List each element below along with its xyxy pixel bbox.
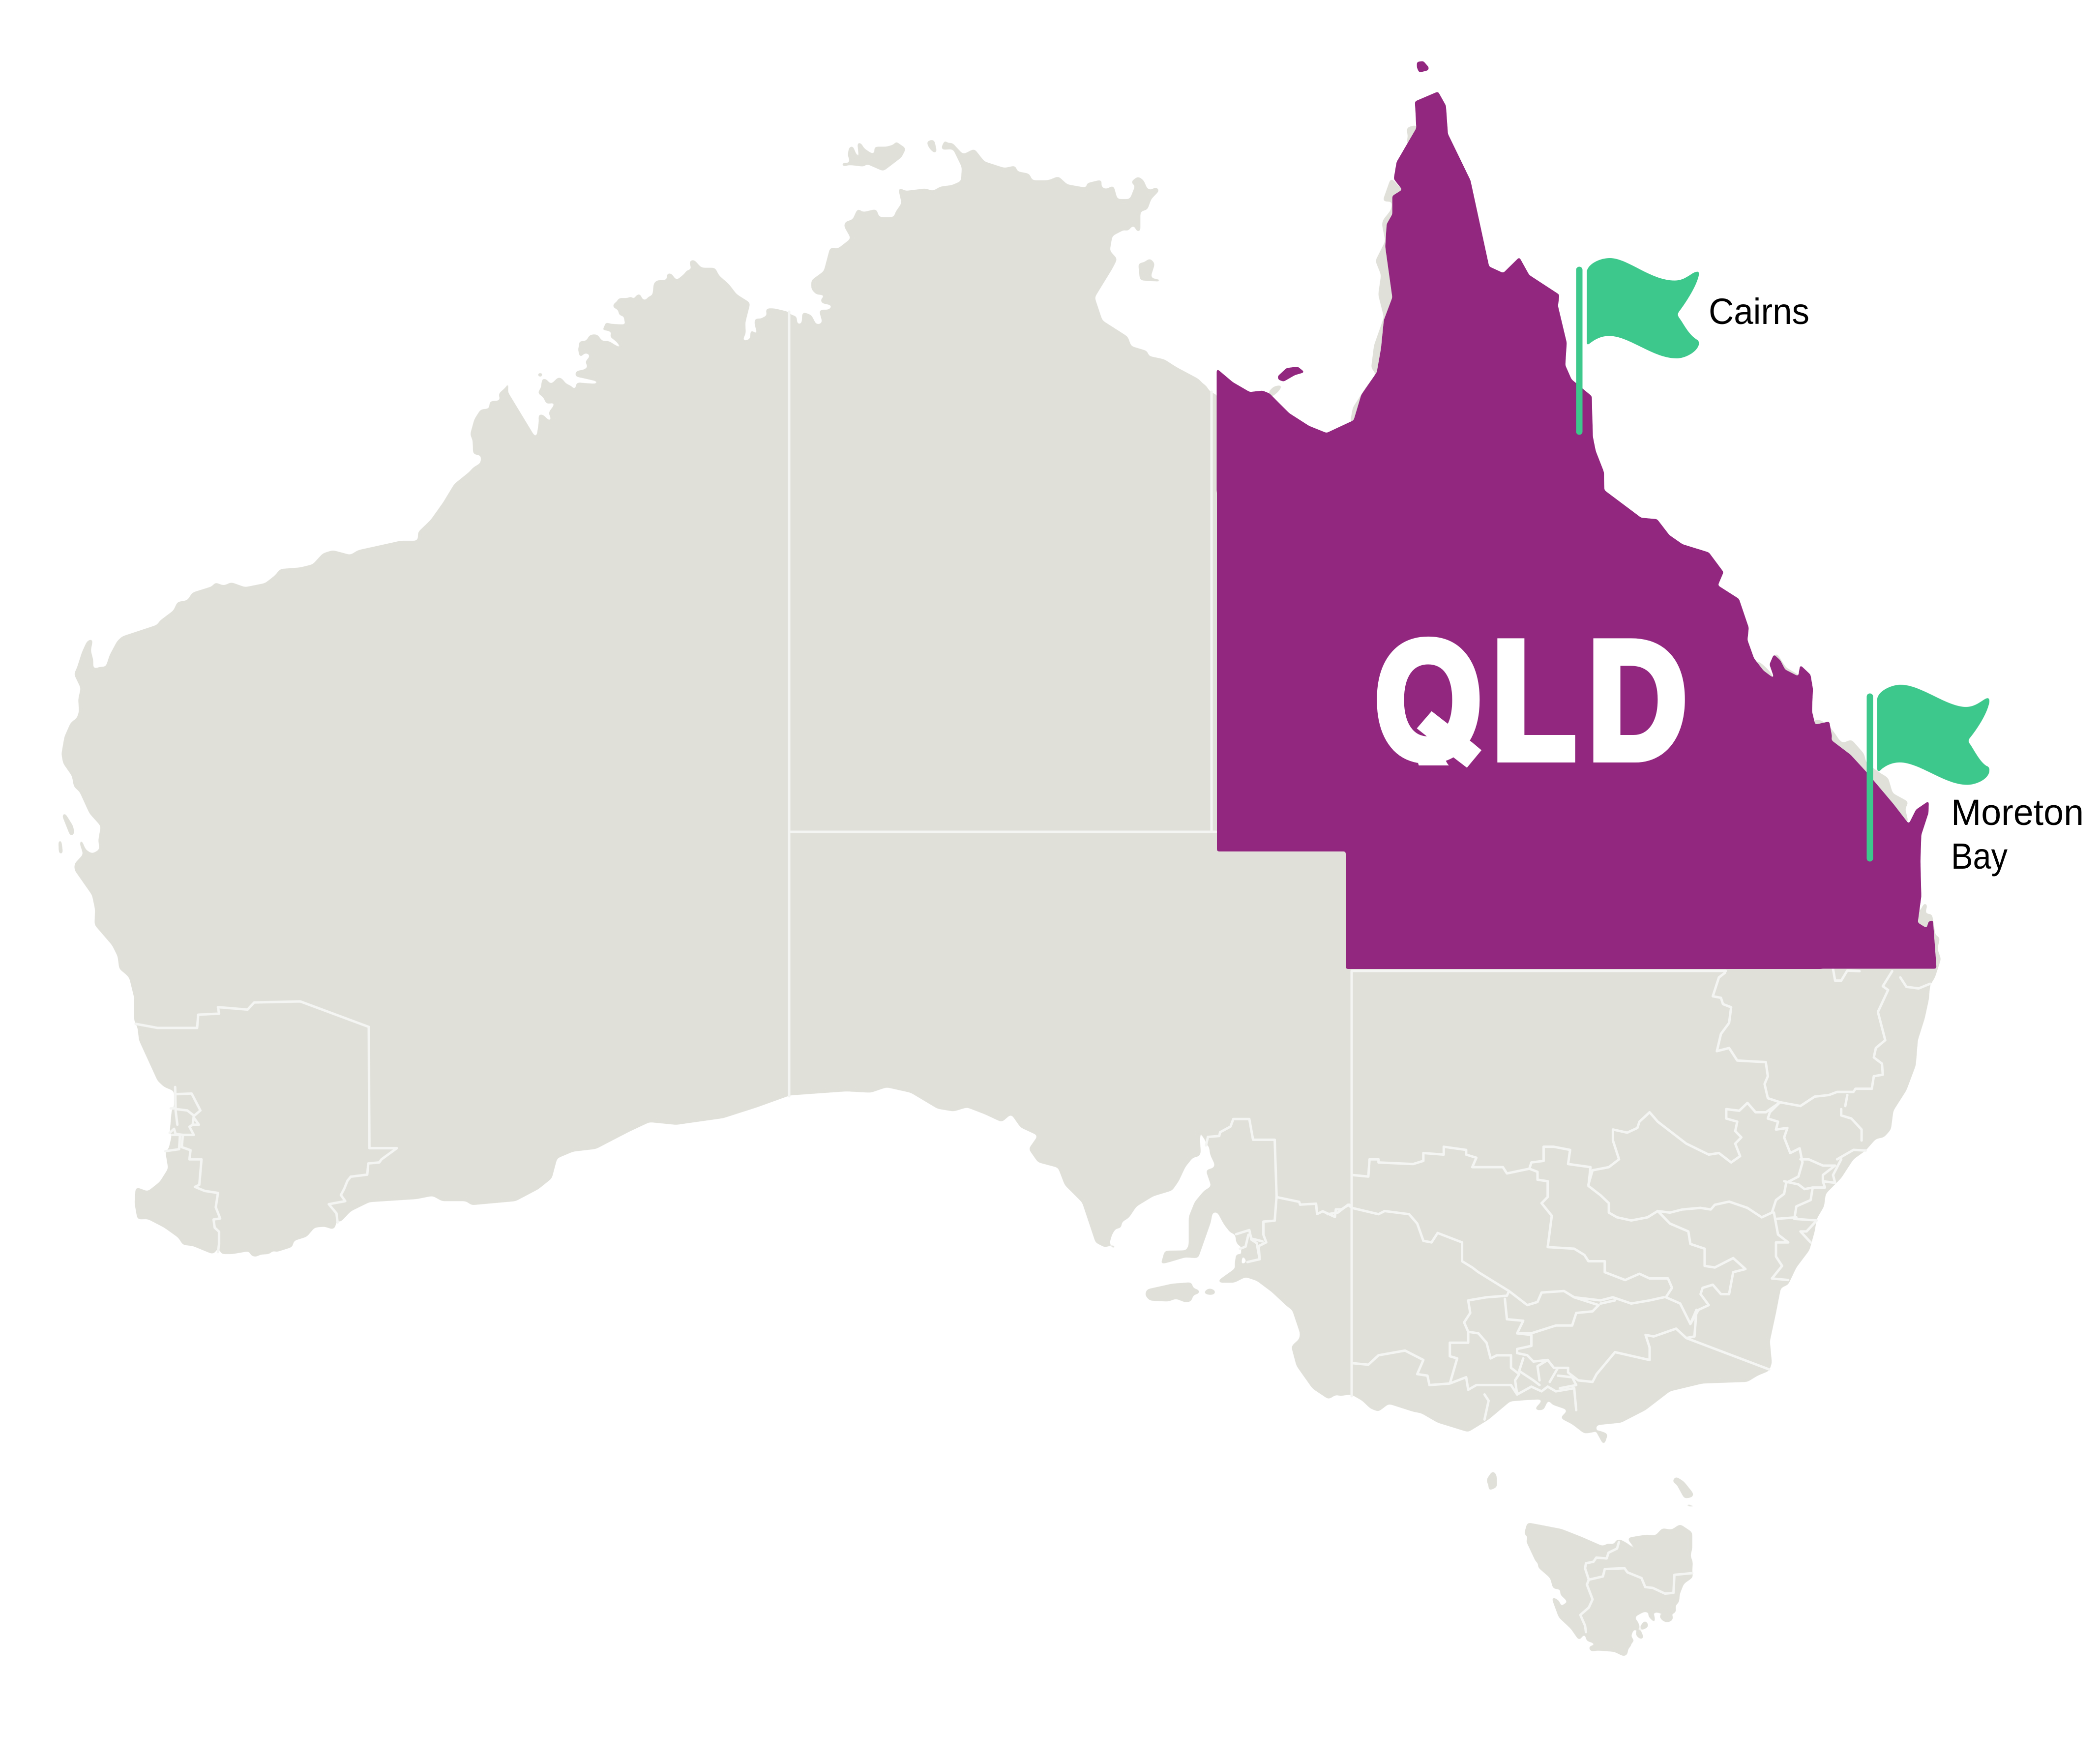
map: Australian land mass (58, 125, 1941, 1656)
flag pole (1866, 697, 1873, 858)
north-east Northern Territory coast (1112, 348, 1215, 442)
QLD letters: QLD (1375, 607, 1687, 794)
south-west coast (118, 959, 443, 1257)
central land base and south coast (120, 201, 1875, 1379)
regional boundaries (136, 312, 1930, 1632)
Tasmania (1486, 1470, 1700, 1656)
Top End coast and islands (811, 138, 1179, 369)
mask below the Q baseline (1372, 765, 1495, 800)
Cape York (1217, 61, 1604, 492)
Queensland body (1217, 442, 1822, 969)
south-east Queensland coast (1819, 721, 1937, 968)
flag pole (1576, 270, 1582, 432)
marker: Moreton Bay flag (1870, 685, 1989, 858)
south-west Western Australia regions (136, 1001, 397, 1252)
heading: QLD state label (1372, 607, 1687, 800)
flag cloth (1587, 258, 1699, 358)
west coast (58, 541, 433, 1032)
western Victoria coast (1291, 1346, 1339, 1399)
NSW and Victoria regions (1328, 969, 1930, 1420)
label: Cairns: Cairns (1709, 291, 1809, 332)
south-east coast (1328, 959, 1941, 1446)
state borders (789, 312, 1726, 1396)
label: Moreton Bay (1951, 792, 2084, 877)
south-east Queensland land behind the highlighted state (1819, 721, 1941, 1008)
Cape York land fragments (1205, 125, 1430, 492)
South Australia regions (1206, 1119, 1351, 1262)
flag cloth (1877, 685, 1989, 785)
central Queensland coastal fragments (1743, 653, 1838, 737)
central Queensland coast (1573, 418, 1832, 737)
Q tail (1417, 711, 1481, 768)
marker: Cairns flag (1579, 258, 1699, 432)
label: Moreton Bay: Bay (1951, 836, 2008, 877)
Tasmania regions (1580, 1542, 1692, 1632)
label: Moreton Bay: Moreton (1951, 792, 2084, 833)
South Australian gulfs (1106, 1057, 1401, 1352)
state: Queensland highlighted (1217, 61, 1937, 969)
Kimberley coast (418, 260, 811, 590)
